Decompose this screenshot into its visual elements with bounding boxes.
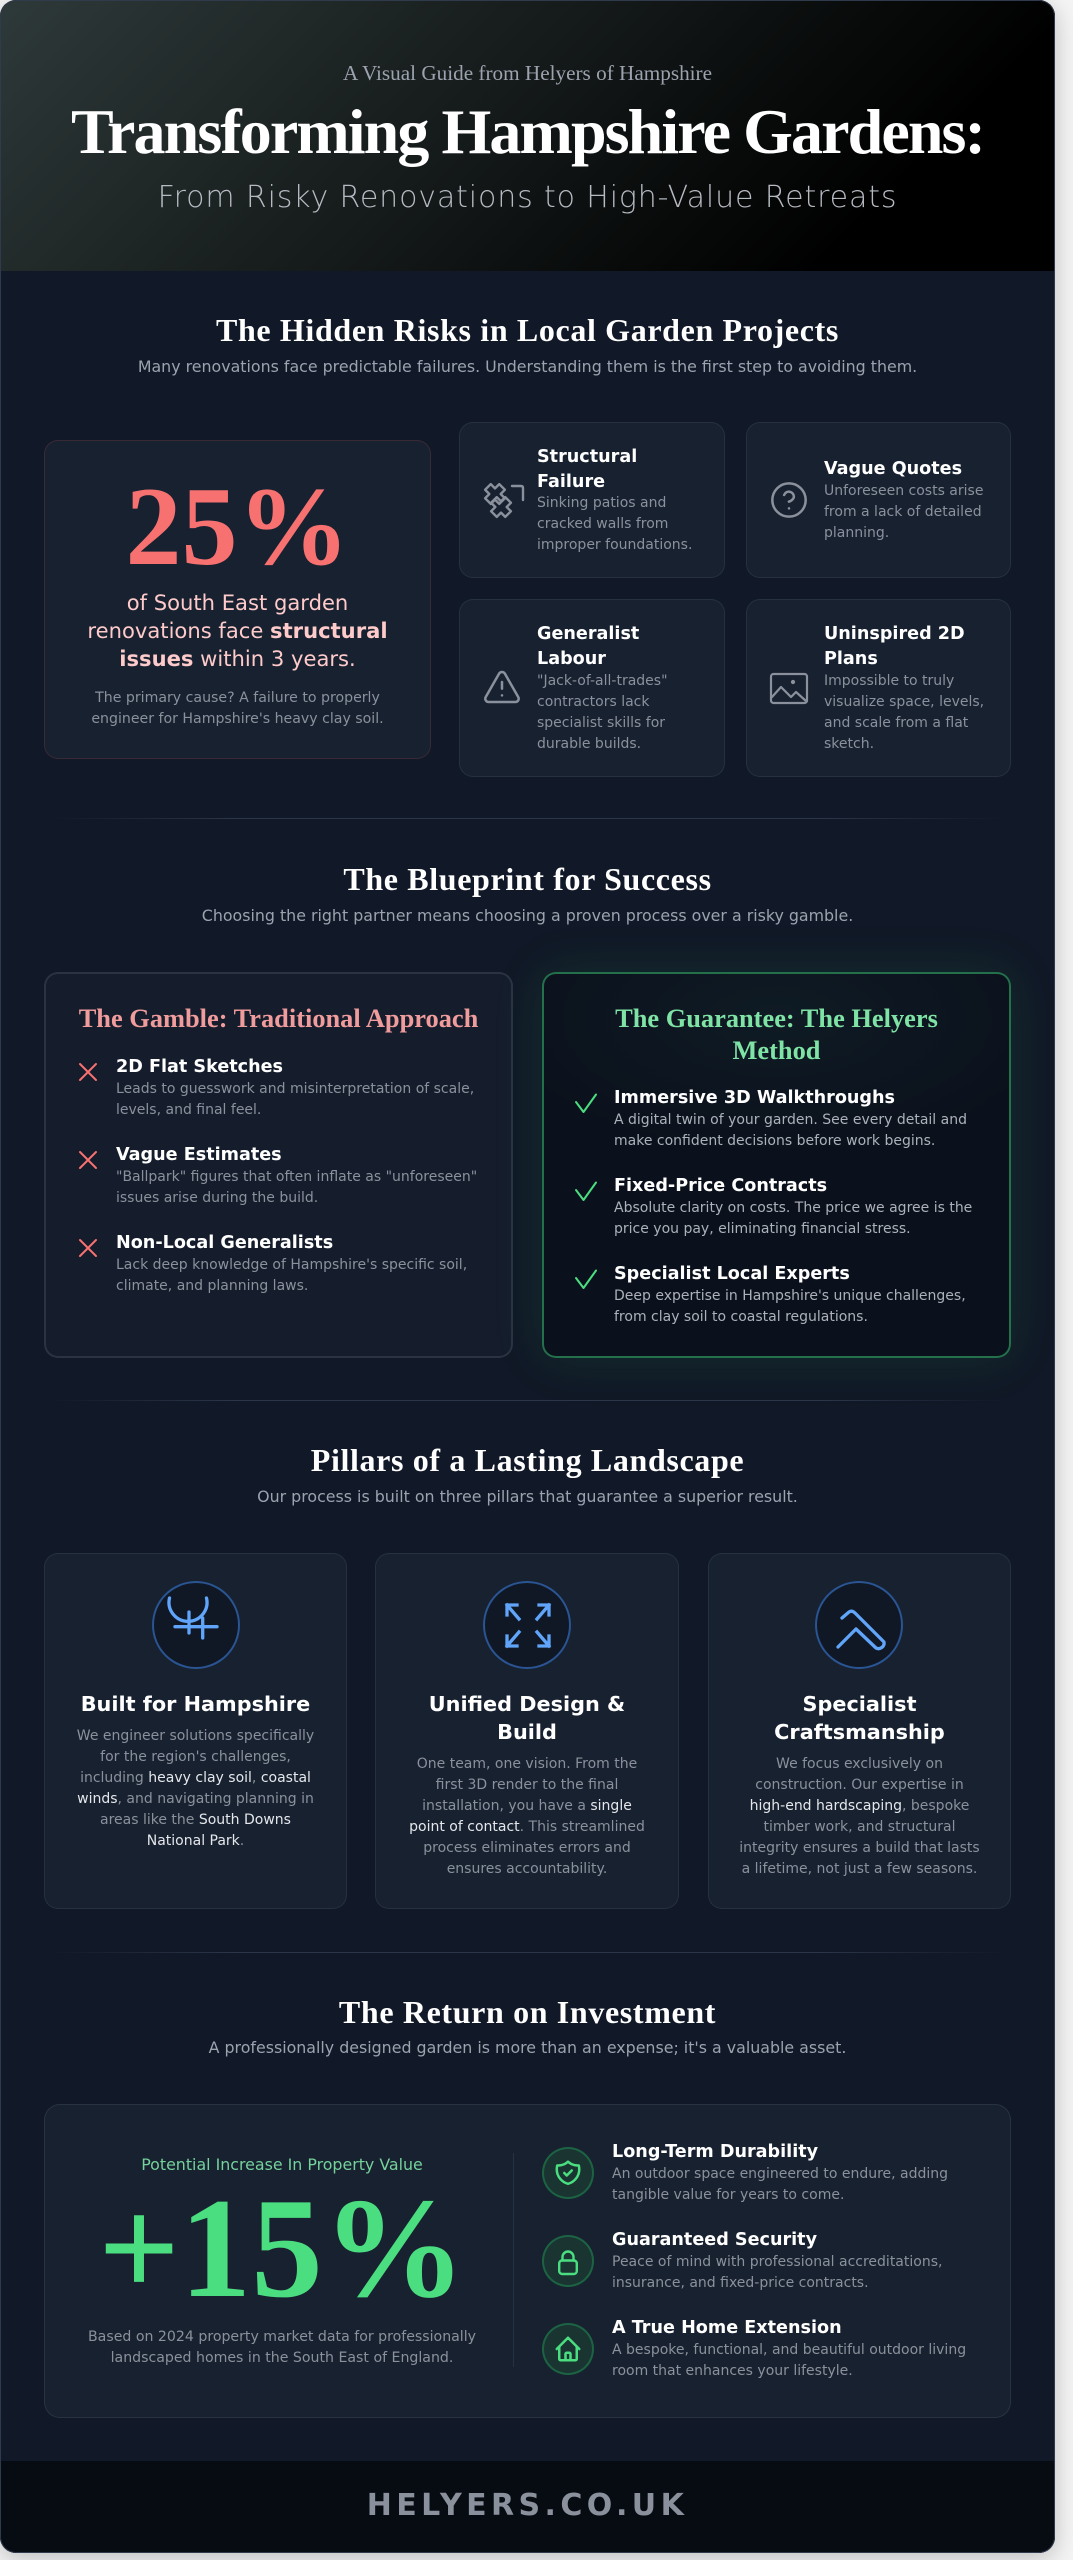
icon: check	[575, 1270, 597, 1289]
heading: blueprint: The Blueprint for Success	[343, 861, 712, 897]
item title: 2D Flat Sketches	[116, 1057, 283, 1077]
title: Generalist	[537, 624, 639, 644]
description: durable builds.	[537, 736, 641, 752]
subheading: pillars: Our process is built on three pillars that guarantee a superior result.	[257, 1487, 798, 1506]
benefit title: Guaranteed Security	[612, 2230, 817, 2250]
pillar text	[739, 1756, 980, 1877]
item text	[116, 1169, 477, 1206]
pillar text: National Park.	[147, 1833, 244, 1849]
panel: unified design	[375, 1553, 679, 1909]
pillar title	[429, 1692, 625, 1744]
gamble title: The Gamble: Traditional Approach	[79, 1003, 478, 1033]
item title: Immersive 3D Walkthroughs	[614, 1088, 895, 1108]
stat description: of South East garden	[127, 590, 348, 615]
panel: vague quotes	[746, 422, 1011, 578]
panel: structural failure	[459, 422, 725, 578]
pillar text: construction. Our expertise in	[755, 1777, 964, 1793]
stat note	[91, 690, 384, 727]
pillar text: high-end hardscaping, bespoke	[750, 1798, 969, 1814]
title: Structural	[537, 447, 637, 467]
benefit text: Peace of mind with professional accreditations,	[612, 2254, 942, 2270]
footer	[0, 2461, 1055, 2553]
panel: generalist labour	[459, 599, 725, 777]
item text: A digital twin of your garden. See every detail and	[614, 1112, 967, 1128]
pillar title: Craftsmanship	[774, 1720, 945, 1744]
icon: hammer	[815, 1581, 903, 1669]
item text: climate, and planning laws.	[116, 1278, 308, 1294]
main title: Transforming Hampshire Gardens:	[71, 96, 984, 166]
pillar text: for the region's challenges,	[100, 1749, 291, 1765]
panel: uninspired 2d plans	[746, 599, 1011, 777]
benefit text: tangible value for years to come.	[612, 2187, 844, 2203]
subheading: return on investment: A professionally designed garden is more than an expense; it's a valuable asset.	[209, 2038, 846, 2057]
panel: 25% statistic	[44, 440, 431, 759]
icon: home	[542, 2323, 594, 2375]
benefit: durability	[542, 2142, 948, 2203]
guarantee item: local experts	[575, 1264, 966, 1325]
title: Labour	[537, 649, 606, 669]
header	[0, 0, 1055, 271]
gamble item: estimates	[79, 1145, 477, 1206]
title: Vague Quotes	[824, 459, 962, 479]
gamble item: generalists	[79, 1233, 467, 1294]
benefit text: room that enhances your lifestyle.	[612, 2363, 853, 2379]
value note: landscaped homes in the South East of England.	[111, 2350, 453, 2366]
panel: specialist craftsmanship	[708, 1553, 1011, 1909]
description: sketch.	[824, 736, 874, 752]
value note: Based on 2024 property market data for professionally	[88, 2328, 476, 2344]
description: visualize space, levels,	[824, 694, 984, 710]
pillar title: Specialist	[802, 1692, 917, 1716]
title	[537, 624, 639, 669]
item text: price you pay, eliminating financial stress.	[614, 1221, 911, 1237]
heading: pillars: Pillars of a Lasting Landscape	[311, 1442, 744, 1478]
benefit text: insurance, and fixed-price contracts.	[612, 2275, 869, 2291]
item text: from clay soil to coastal regulations.	[614, 1309, 868, 1325]
item title: Non-Local Generalists	[116, 1233, 333, 1253]
panel: return on investment	[44, 2104, 1011, 2418]
item text	[116, 1081, 474, 1118]
panel: the guarantee	[542, 972, 1011, 1358]
description: specialist skills for	[537, 714, 665, 730]
description: contractors lack	[537, 694, 650, 710]
description: cracked walls from	[537, 516, 668, 532]
description: "Jack-of-all-trades"	[537, 672, 668, 688]
subtitle: From Risky Renovations to High-Value Retreats	[158, 180, 897, 215]
pillar text: installation, you have a single	[422, 1798, 632, 1814]
item text: "Ballpark" figures that often inflate as "unforeseen"	[116, 1169, 477, 1185]
item title: Specialist Local Experts	[614, 1264, 850, 1284]
panel: the gamble	[44, 972, 513, 1358]
guarantee item: 3d walkthroughs	[575, 1088, 967, 1149]
item text	[116, 1257, 467, 1294]
benefit text: An outdoor space engineered to endure, adding	[612, 2166, 948, 2182]
item text: Leads to guesswork and misinterpretation of scale,	[116, 1081, 474, 1097]
stat note: The primary cause? A failure to properly	[95, 690, 380, 706]
title: Failure	[537, 472, 605, 492]
guarantee title: The Guarantee: The Helyers	[615, 1003, 938, 1033]
benefit title: Long-Term Durability	[612, 2142, 818, 2162]
pillar text	[77, 1728, 314, 1849]
title: Plans	[824, 649, 878, 669]
icon: check	[575, 1182, 597, 1201]
heading: return on investment: The Return on Investment	[339, 1994, 716, 2030]
stat description: issues within 3 years.	[119, 646, 356, 671]
item text	[614, 1200, 972, 1237]
benefit: security	[542, 2228, 982, 2294]
icon: check	[575, 1094, 597, 1113]
icon: shield	[542, 2147, 594, 2199]
pillar text: winds, and navigating planning in	[77, 1791, 314, 1807]
big stat +15%: +15%	[98, 2169, 466, 2327]
item text: make confident decisions before work begins.	[614, 1133, 935, 1149]
benefit text	[612, 2252, 942, 2294]
heading: hidden risks: The Hidden Risks in Local Garden Projects	[216, 312, 839, 348]
pillar title	[774, 1692, 945, 1744]
footer website: HELYERS.CO.UK	[367, 2488, 688, 2523]
gamble item: 2d sketches	[79, 1057, 474, 1118]
item text: Absolute clarity on costs. The price we agree is the	[614, 1200, 972, 1216]
subheading: hidden risks: Many renovations face predictable failures. Understanding them is the first step to avoiding them.	[138, 357, 917, 376]
benefit text	[612, 2340, 966, 2382]
pillar text: a lifetime, not just a few seasons.	[742, 1861, 977, 1877]
pillar title: Build	[497, 1720, 557, 1744]
icon: cross	[79, 1063, 97, 1081]
icon: cross	[79, 1239, 97, 1257]
pillar text: point of contact. This streamlined	[409, 1819, 645, 1835]
description	[824, 672, 984, 752]
item text: Deep expertise in Hampshire's unique challenges,	[614, 1288, 966, 1304]
icon: warning triangle	[484, 670, 520, 704]
panel: built for hampshire	[44, 1553, 347, 1909]
stat note: engineer for Hampshire's heavy clay soil.	[91, 711, 384, 727]
pillar title: Built for Hampshire	[81, 1692, 310, 1716]
description: and scale from a flat	[824, 714, 968, 730]
icon: question mark	[771, 482, 807, 518]
description	[824, 482, 983, 540]
icon: broken bricks	[484, 482, 524, 518]
description: Impossible to truly	[824, 672, 954, 688]
item text: Lack deep knowledge of Hampshire's specific soil,	[116, 1257, 467, 1273]
description	[537, 672, 668, 752]
benefit: home extension	[542, 2316, 982, 2382]
guarantee title	[615, 1003, 938, 1065]
description: planning.	[824, 524, 889, 540]
icon: expand arrows	[483, 1581, 571, 1669]
pillar text: areas like the South Downs	[100, 1812, 291, 1828]
description: Sinking patios and	[537, 495, 666, 511]
benefit text: A bespoke, functional, and beautiful outdoor living	[612, 2342, 966, 2358]
big stat 25%: 25%	[126, 465, 350, 589]
header eyebrow: A Visual Guide from Helyers of Hampshire	[343, 60, 712, 84]
item text: levels, and final feel.	[116, 1102, 261, 1118]
description	[537, 495, 692, 553]
pillar text: timber work, and structural	[764, 1819, 956, 1835]
benefit title: A True Home Extension	[612, 2318, 842, 2338]
title	[824, 624, 965, 669]
pillar text	[409, 1756, 645, 1877]
pillar text: ensures accountability.	[447, 1861, 607, 1877]
item text	[614, 1288, 966, 1325]
pillar title: Unified Design &	[429, 1692, 625, 1716]
icon: drafting compass	[152, 1581, 240, 1669]
description: from a lack of detailed	[824, 504, 982, 520]
stat description	[87, 590, 388, 671]
item title: Fixed-Price Contracts	[614, 1176, 827, 1196]
icon: lock	[542, 2235, 594, 2287]
description: improper foundations.	[537, 537, 692, 553]
icon: image	[770, 672, 808, 704]
pillar text: One team, one vision. From the	[417, 1756, 637, 1772]
pillar text: We focus exclusively on	[776, 1756, 943, 1772]
benefit text	[612, 2166, 948, 2203]
guarantee title: Method	[733, 1035, 820, 1065]
subheading: blueprint: Choosing the right partner means choosing a proven process over a risky gamble.	[202, 906, 853, 925]
description: Unforeseen costs arise	[824, 482, 983, 498]
item text: issues arise during the build.	[116, 1190, 318, 1206]
pillar text: first 3D render to the final	[436, 1777, 618, 1793]
icon: cross	[79, 1151, 97, 1169]
pillar text: We engineer solutions specifically	[77, 1728, 314, 1744]
stat description: renovations face structural	[87, 618, 388, 643]
pillar text: process eliminates errors and	[423, 1840, 631, 1856]
guarantee item: fixed price	[575, 1176, 972, 1237]
pillar text: integrity ensures a build that lasts	[739, 1840, 980, 1856]
value label: Potential Increase In Property Value	[141, 2155, 423, 2174]
item title: Vague Estimates	[116, 1145, 282, 1165]
item text	[614, 1112, 967, 1149]
title	[537, 447, 637, 492]
pillar text: including heavy clay soil, coastal	[80, 1770, 311, 1786]
value note	[88, 2328, 476, 2366]
title: Uninspired 2D	[824, 624, 965, 644]
